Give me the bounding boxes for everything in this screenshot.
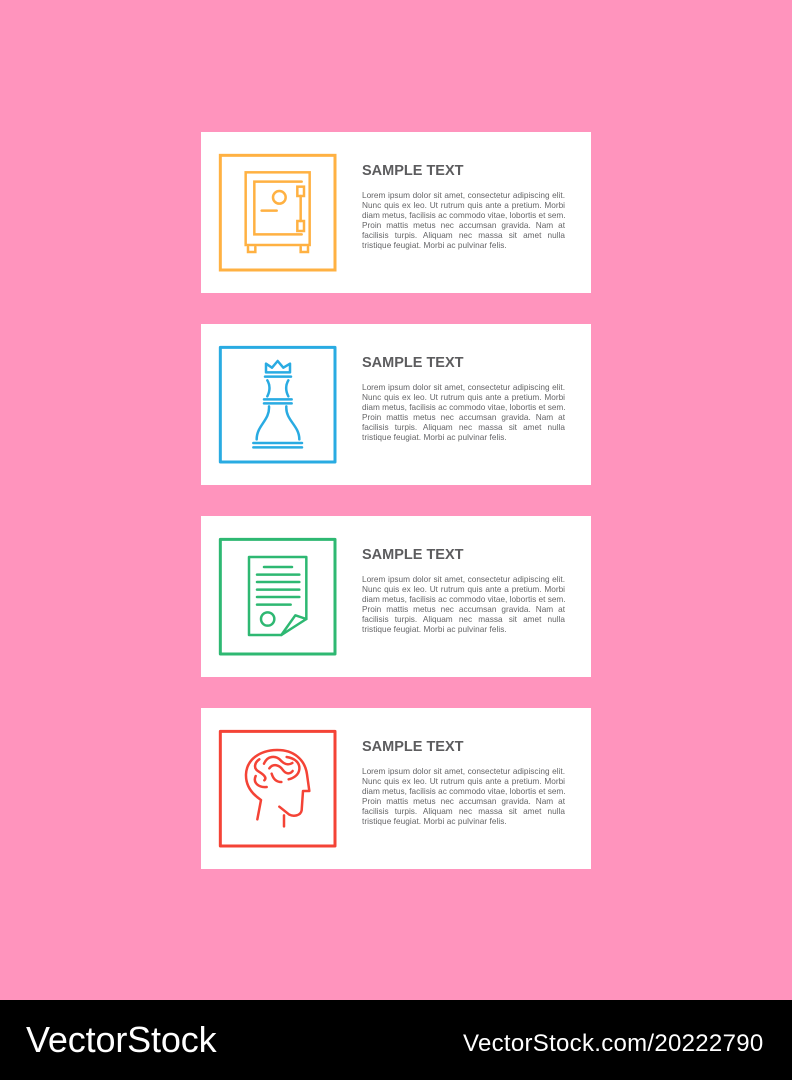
- text block: Nunc quis ex leo. Ut rutrum quis ante a pretium. Morbi: [362, 393, 565, 402]
- text block: Nunc quis ex leo. Ut rutrum quis ante a pretium. Morbi: [362, 777, 565, 786]
- heading: SAMPLE TEXT: [362, 547, 464, 563]
- text block: Lorem ipsum dolor sit amet, consectetur adipiscing elit.: [362, 191, 565, 200]
- text block: tristique feugiat. Morbi ac pulvinar felis.: [362, 241, 507, 250]
- text block: facilisis turpis. Aliquam nec massa sit amet nulla: [362, 231, 565, 240]
- text block: [362, 767, 566, 826]
- heading: SAMPLE TEXT: [362, 163, 464, 179]
- heading: SAMPLE TEXT: [362, 739, 464, 755]
- text block: Lorem ipsum dolor sit amet, consectetur adipiscing elit.: [362, 575, 565, 584]
- heading: SAMPLE TEXT: [362, 355, 464, 371]
- text block: Proin mattis metus nec accumsan gravida. Nam at: [362, 605, 565, 614]
- text block: Nunc quis ex leo. Ut rutrum quis ante a pretium. Morbi: [362, 585, 565, 594]
- text block: Nunc quis ex leo. Ut rutrum quis ante a pretium. Morbi: [362, 201, 565, 210]
- text block: diam metus, facilisis ac commodo vitae, lobortis et sem.: [362, 595, 566, 604]
- text block: Proin mattis metus nec accumsan gravida. Nam at: [362, 221, 565, 230]
- text block: Proin mattis metus nec accumsan gravida. Nam at: [362, 797, 565, 806]
- icon: chess queen in blue frame: [218, 346, 336, 464]
- text block: [362, 191, 566, 250]
- text block: tristique feugiat. Morbi ac pulvinar felis.: [362, 625, 507, 634]
- text block: Lorem ipsum dolor sit amet, consectetur adipiscing elit.: [362, 383, 565, 392]
- text block: facilisis turpis. Aliquam nec massa sit amet nulla: [362, 423, 565, 432]
- text block: facilisis turpis. Aliquam nec massa sit amet nulla: [362, 807, 565, 816]
- logo wordmark: VectorStock: [26, 1019, 216, 1060]
- text block: diam metus, facilisis ac commodo vitae, lobortis et sem.: [362, 211, 566, 220]
- text block: diam metus, facilisis ac commodo vitae, lobortis et sem.: [362, 403, 566, 412]
- text block: [362, 575, 566, 634]
- panel: document card: [201, 516, 591, 676]
- footer bar: [0, 1000, 792, 1080]
- panel: brain card: [201, 708, 591, 868]
- text block: tristique feugiat. Morbi ac pulvinar felis.: [362, 433, 507, 442]
- text block: facilisis turpis. Aliquam nec massa sit amet nulla: [362, 615, 565, 624]
- image url: VectorStock.com/20222790: [463, 1030, 763, 1057]
- icon: head with brain in red frame: [218, 730, 336, 848]
- panel: safe card: [201, 132, 591, 292]
- text block: Proin mattis metus nec accumsan gravida. Nam at: [362, 413, 565, 422]
- text block: tristique feugiat. Morbi ac pulvinar felis.: [362, 817, 507, 826]
- icon: safe in orange frame: [218, 154, 336, 272]
- panel: chess queen card: [201, 324, 591, 484]
- icon: document in green frame: [218, 538, 336, 656]
- text block: Lorem ipsum dolor sit amet, consectetur adipiscing elit.: [362, 767, 565, 776]
- text block: [362, 383, 566, 442]
- text block: diam metus, facilisis ac commodo vitae, lobortis et sem.: [362, 787, 566, 796]
